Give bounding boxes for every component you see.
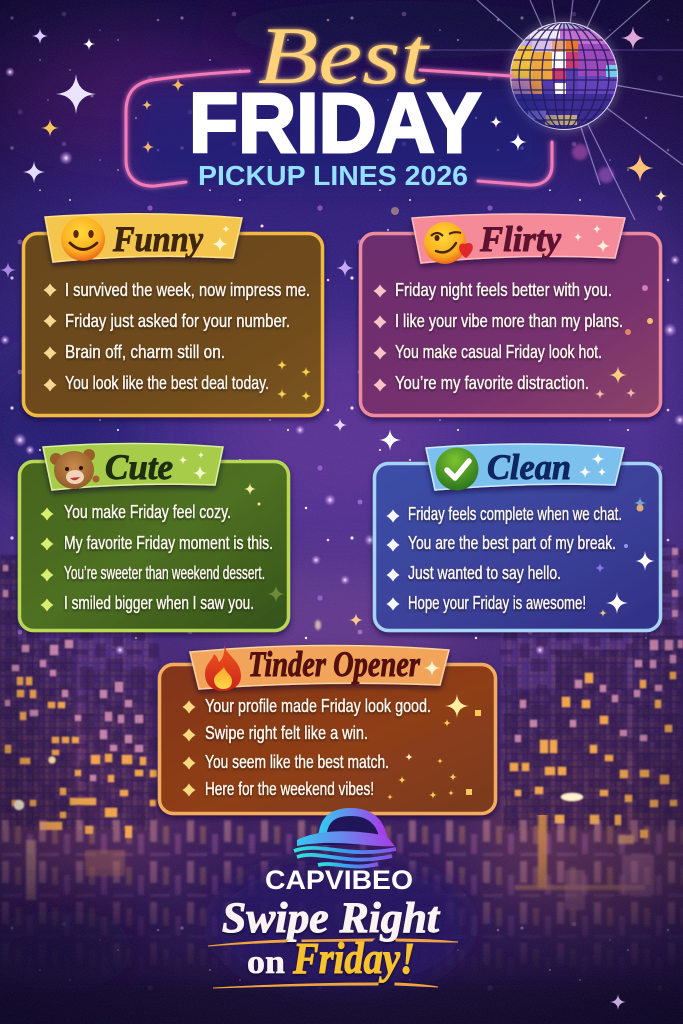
icon: teddy bear bbox=[50, 449, 100, 489]
list text: You seem like the best match. bbox=[205, 752, 389, 772]
sparkles bbox=[574, 224, 610, 253]
list text: Just wanted to say hello. bbox=[408, 563, 561, 583]
icon: smiley bbox=[61, 217, 105, 261]
banner bbox=[426, 444, 624, 490]
reflections bbox=[1, 815, 683, 964]
panel: Flirty bbox=[360, 214, 660, 416]
banner bbox=[45, 214, 242, 262]
slogan: Swipe Right on Friday bbox=[208, 895, 458, 988]
heading: FRIDAY: FRIDAY bbox=[189, 76, 481, 170]
list bbox=[386, 510, 400, 610]
list text: Swipe right felt like a win. bbox=[205, 723, 368, 743]
icon: flame bbox=[205, 644, 241, 691]
list text: I like your vibe more than my plans. bbox=[395, 311, 623, 331]
list text: My favorite Friday moment is this. bbox=[64, 533, 273, 553]
list text: You make Friday feel cozy. bbox=[64, 502, 231, 522]
city skyline bbox=[0, 545, 683, 838]
panel: Cute bbox=[20, 444, 288, 630]
pink windows bbox=[3, 548, 683, 781]
banner title: Funny bbox=[112, 219, 204, 259]
list text: You are the best part of my break. bbox=[408, 533, 616, 553]
glitter bbox=[595, 285, 653, 399]
sparkles bbox=[178, 452, 208, 480]
banner title: Cute bbox=[105, 447, 173, 487]
disco ball with light rays bbox=[420, 0, 683, 220]
list bbox=[40, 508, 54, 612]
panel: Funny bbox=[24, 214, 322, 416]
sparkle bbox=[424, 660, 440, 676]
banner bbox=[190, 645, 449, 689]
heading: Best: Best bbox=[258, 10, 431, 101]
icon: check mark bbox=[436, 448, 478, 490]
banner title: Flirty bbox=[479, 219, 562, 259]
banner title: Clean bbox=[487, 447, 571, 487]
slogan word: on: on bbox=[247, 944, 285, 981]
slogan line 1: Swipe Right bbox=[222, 895, 441, 942]
list bbox=[44, 284, 56, 392]
list text: I survived the week, now impress me. bbox=[65, 280, 310, 300]
banner title: Tinder Opener bbox=[248, 644, 421, 684]
card bbox=[360, 234, 660, 416]
list text: Friday just asked for your number. bbox=[65, 311, 290, 331]
logo: Capvibeo bbox=[265, 812, 413, 895]
list text: You look like the best deal today. bbox=[65, 373, 269, 393]
icon: flirty face bbox=[424, 222, 473, 264]
banner bbox=[412, 214, 625, 263]
banner bbox=[43, 444, 223, 490]
list text: Brain off, charm still on. bbox=[65, 342, 225, 362]
glitter bbox=[244, 483, 285, 603]
list text: Hope your Friday is awesome! bbox=[408, 593, 586, 613]
upper underline bbox=[208, 939, 458, 946]
sparkles bbox=[212, 225, 230, 252]
logo mark bbox=[294, 812, 396, 867]
glitter bbox=[277, 360, 311, 401]
card bbox=[20, 462, 288, 630]
small stars inside frame bbox=[142, 79, 527, 153]
list text bbox=[395, 280, 623, 393]
neon frame bbox=[126, 70, 552, 186]
list text: I smiled bigger when I saw you. bbox=[64, 593, 254, 613]
street lamps bbox=[14, 800, 24, 810]
list text bbox=[64, 502, 273, 613]
navy backdrop bbox=[135, 85, 545, 183]
header title block bbox=[126, 10, 552, 191]
logo wordmark: CAPVIBEO bbox=[265, 865, 413, 895]
list text: You make casual Friday look hot. bbox=[395, 342, 602, 362]
list text: Your profile made Friday look good. bbox=[205, 696, 431, 716]
sparkles bbox=[579, 452, 606, 478]
list text bbox=[65, 280, 310, 393]
card bbox=[160, 664, 496, 814]
list text bbox=[205, 696, 431, 799]
list text: Here for the weekend vibes! bbox=[205, 779, 374, 799]
list bbox=[374, 284, 386, 392]
card bbox=[24, 234, 322, 416]
slogan word: Friday!: Friday! bbox=[292, 934, 415, 983]
glitter bbox=[595, 497, 655, 617]
subheading: PICKUP LINES 2026 bbox=[198, 160, 468, 191]
panel: Tinder Opener bbox=[160, 644, 496, 814]
list bbox=[182, 700, 196, 796]
warm windows bbox=[5, 672, 677, 838]
list text: You’re my favorite distraction. bbox=[395, 373, 589, 393]
panel: Clean bbox=[374, 444, 660, 630]
glitter bbox=[387, 694, 481, 800]
list text: Friday night feels better with you. bbox=[395, 280, 612, 300]
list text: You’re sweeter than weekend dessert. bbox=[64, 563, 265, 583]
card bbox=[374, 464, 660, 630]
list text bbox=[408, 504, 622, 613]
lower underline bbox=[213, 983, 438, 988]
